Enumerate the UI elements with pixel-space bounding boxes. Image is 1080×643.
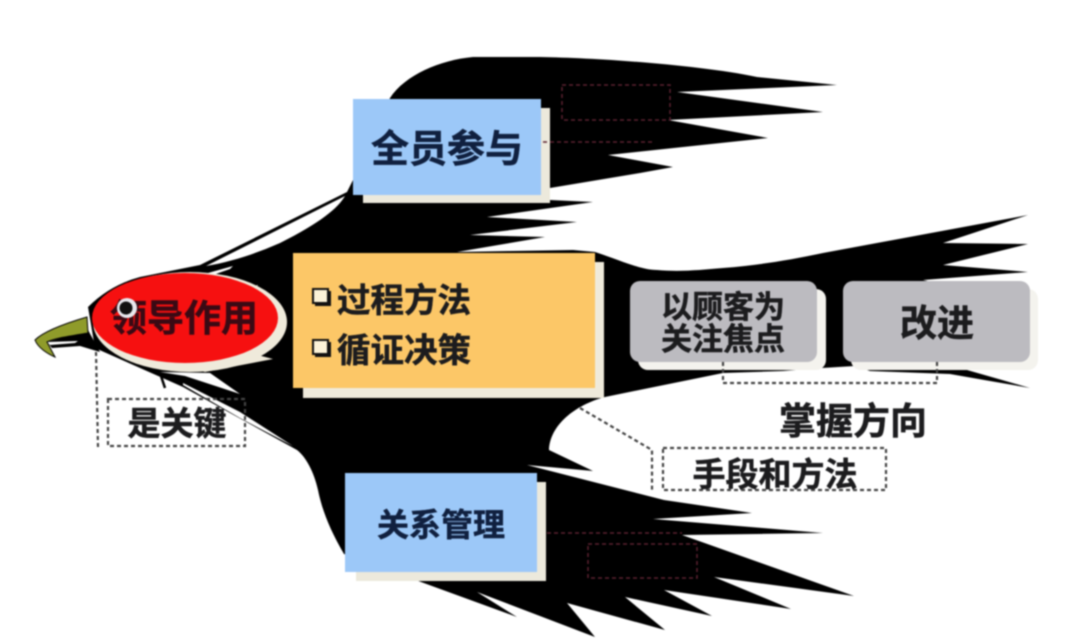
callout: key: 是关键 — [128, 405, 226, 442]
panel: relationship management: 关系管理 — [377, 507, 505, 543]
callout: means and methods: 手段和方法 — [692, 456, 858, 493]
panel: customer focus: 以顾客为 — [661, 290, 785, 325]
callout: means and methods — [580, 408, 886, 493]
bird silhouette — [88, 57, 1030, 637]
panel: customer focus — [630, 281, 826, 370]
bracket linking customer focus and improvement — [723, 362, 937, 383]
head oval: leadership — [92, 272, 287, 372]
panel: improvement — [843, 281, 1038, 370]
icon: eye — [117, 298, 137, 318]
panel: full participation: 全员参与 — [371, 129, 523, 171]
dashed marks on lower wing — [547, 533, 697, 578]
callout: key — [96, 352, 245, 447]
panel: customer focus: 关注焦点 — [661, 322, 785, 357]
panel: process and evidence — [293, 253, 604, 398]
heading: leadership: 领导作用 — [110, 298, 258, 339]
icon: checkbox — [313, 340, 331, 357]
panel: improvement: 改进 — [900, 303, 974, 344]
icon: bird leg — [160, 373, 165, 388]
dashed marks on upper wing — [543, 85, 670, 142]
text: grasp direction: 掌握方向 — [779, 401, 927, 442]
icon: beak — [35, 317, 100, 357]
text: evidence-based decisions: 循证决策 — [337, 333, 471, 370]
panel: full participation — [353, 99, 550, 203]
text: process approach: 过程方法 — [337, 283, 471, 320]
icon: checkbox — [313, 289, 331, 306]
panel: relationship management — [345, 473, 546, 581]
